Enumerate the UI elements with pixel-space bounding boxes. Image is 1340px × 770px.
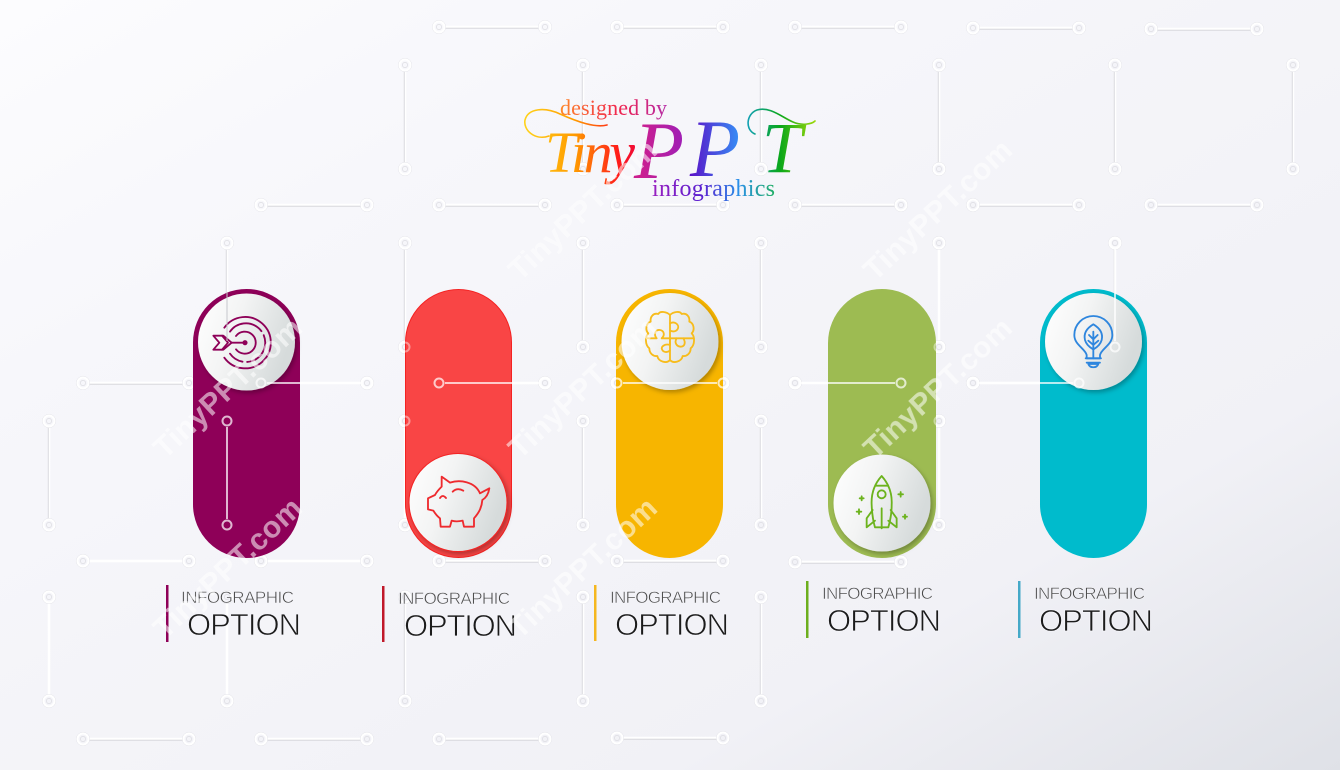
watermark: TinyPPT.com: [502, 133, 664, 287]
watermark: TinyPPT.com: [502, 491, 664, 645]
icon: rocket: [857, 476, 907, 528]
disc: [198, 294, 295, 390]
panel: option 3 yellow: [594, 289, 729, 642]
icon: puzzle brain: [646, 312, 694, 362]
pill: [1040, 289, 1147, 558]
logo flourish: Tiny swash: [525, 110, 607, 137]
label: OPTION: OPTION: [827, 603, 941, 638]
logo word: Tiny: Tiny: [545, 120, 635, 185]
logo letter: T: T: [762, 108, 807, 188]
accent bar: [166, 585, 168, 642]
label: INFOGRAPHIC: INFOGRAPHIC: [181, 588, 294, 607]
icon: piggy bank: [428, 477, 489, 527]
label: INFOGRAPHIC: INFOGRAPHIC: [1034, 584, 1145, 603]
watermark: TinyPPT.com: [857, 311, 1019, 465]
logo letter: P: P: [633, 105, 684, 196]
logo flourish: T swash: [748, 109, 815, 134]
label: INFOGRAPHIC: INFOGRAPHIC: [398, 589, 510, 608]
pill: [616, 289, 723, 558]
watermark: TinyPPT.com: [147, 311, 309, 465]
label: OPTION: OPTION: [1039, 603, 1153, 638]
label: OPTION: OPTION: [404, 608, 517, 643]
panel: option 2 red: [382, 290, 517, 643]
watermark: TinyPPT.com: [857, 133, 1019, 287]
watermark: TinyPPT.com: [502, 311, 664, 465]
icon: target with arrow: [213, 317, 271, 368]
logo line: designed by: designed by: [560, 95, 667, 120]
icon: light bulb with leaf: [1074, 316, 1112, 367]
accent bar: [382, 586, 384, 642]
accent bar: [806, 581, 808, 638]
logo: designed by TinyPPT infographics: [525, 95, 815, 202]
pill: [406, 290, 512, 558]
label: OPTION: OPTION: [615, 607, 729, 642]
disc: [1045, 293, 1142, 390]
panel: option 1 purple: [166, 289, 301, 642]
pill: [828, 289, 936, 558]
disc: [834, 454, 930, 552]
accent bar: [594, 585, 596, 641]
panel: option 4 green: [806, 289, 941, 638]
label: INFOGRAPHIC: INFOGRAPHIC: [610, 588, 721, 607]
watermark: [147, 133, 1019, 645]
panel: option 5 teal: [1018, 289, 1153, 638]
logo line: infographics: infographics: [652, 176, 775, 202]
disc: [409, 454, 507, 552]
label: INFOGRAPHIC: INFOGRAPHIC: [822, 584, 933, 603]
pill: [193, 289, 300, 558]
accent bar: [1018, 581, 1020, 638]
label: OPTION: OPTION: [187, 607, 301, 642]
logo letter: P: P: [689, 103, 740, 194]
watermark: TinyPPT.com: [147, 491, 309, 645]
disc: [622, 293, 718, 390]
